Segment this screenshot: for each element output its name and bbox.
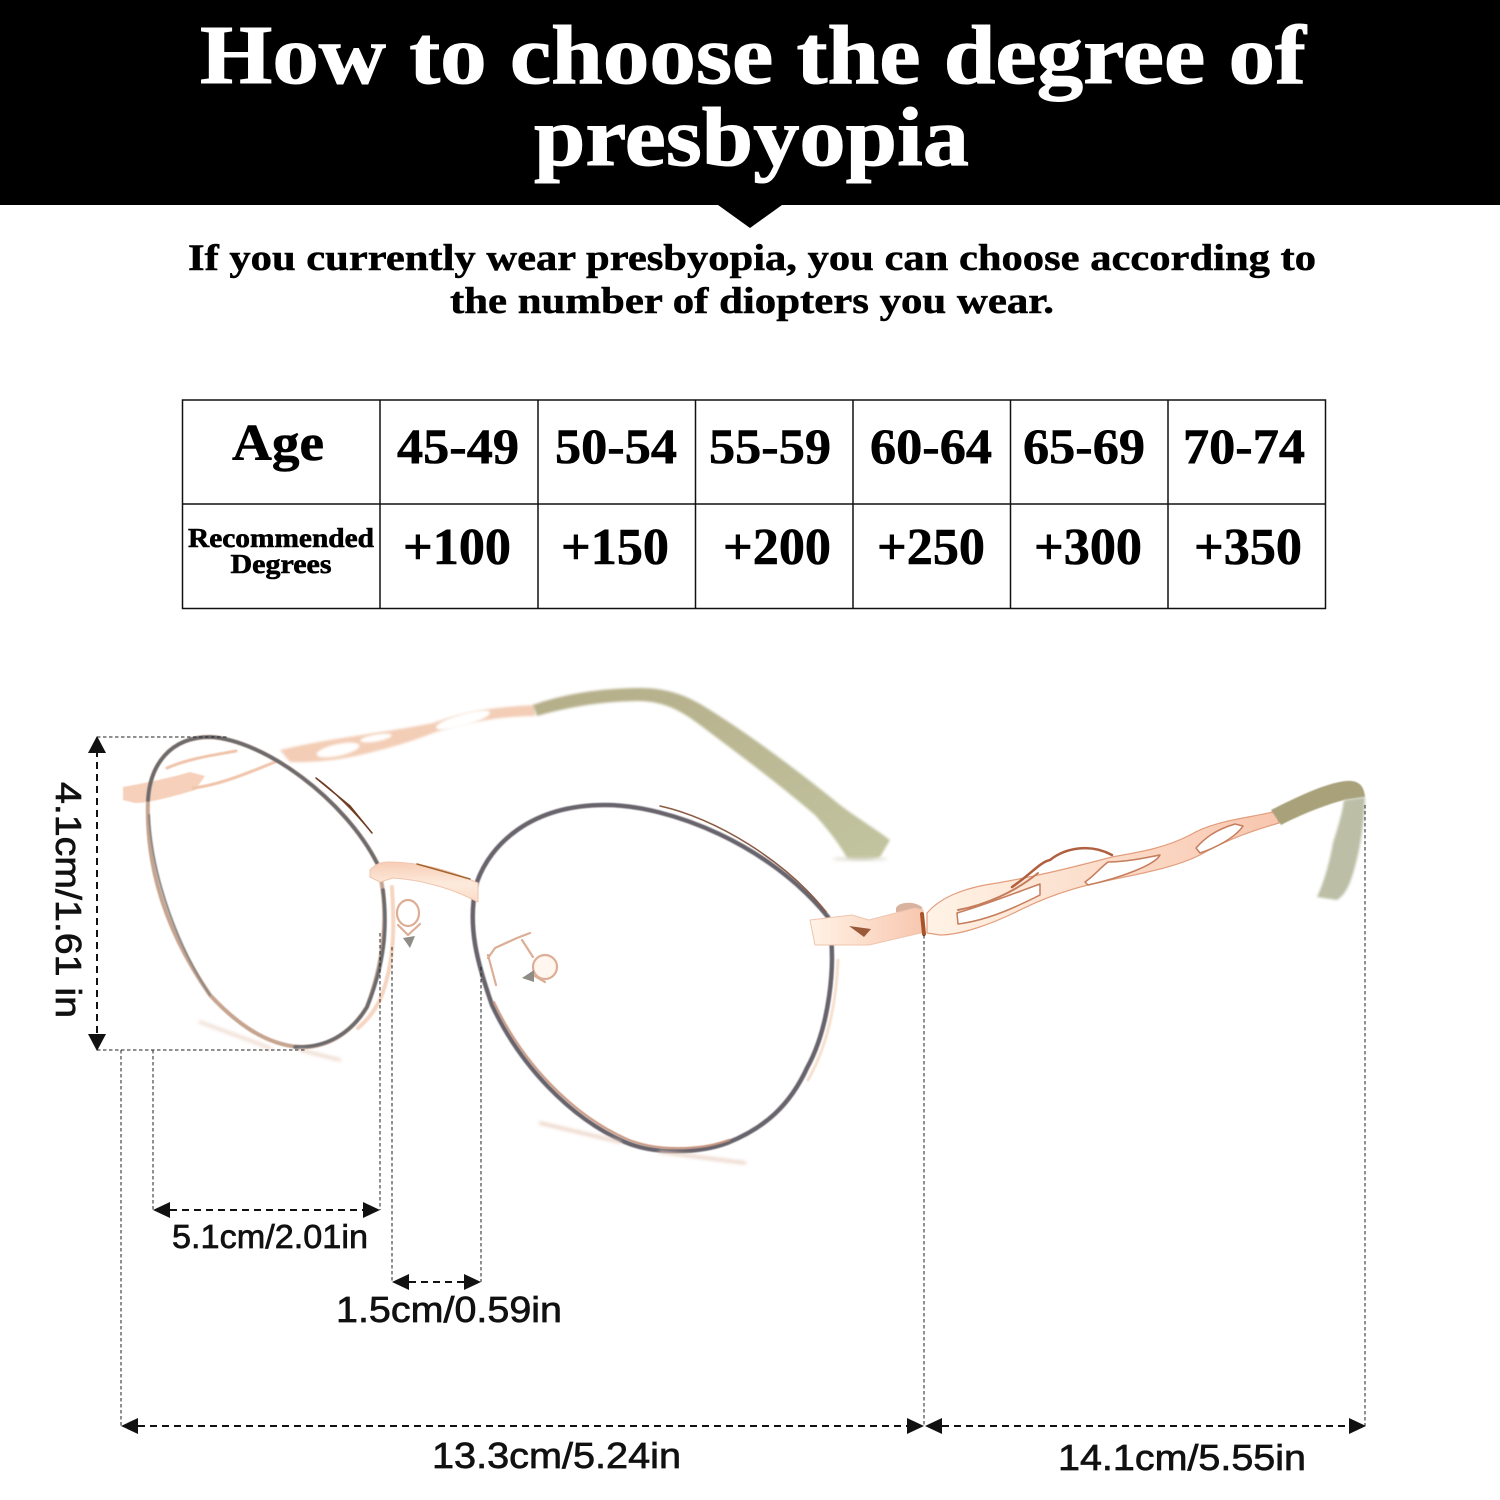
age row: 50-54	[555, 418, 677, 474]
dimension: bridge width: 1.5cm/0.59in	[336, 1289, 562, 1330]
header banner	[0, 0, 1500, 228]
recommended degrees row: +100	[403, 519, 511, 576]
dimension: frame width: 13.3cm/5.24in	[432, 1435, 681, 1476]
recommended degrees row: Degrees	[230, 549, 332, 579]
dimension: frame width	[121, 935, 924, 1476]
recommended degrees row: +200	[723, 519, 831, 576]
dimension: lens height: 4.1cm/1.61 in	[48, 782, 89, 1018]
recommended degrees row: Recommended	[188, 523, 374, 553]
dimension: lens width	[153, 933, 380, 1255]
age row: 65-69	[1023, 418, 1145, 474]
dimension: temple length: 14.1cm/5.55in	[1058, 1437, 1306, 1478]
title	[200, 9, 1307, 184]
right lens	[200, 805, 838, 1163]
age row: 60-64	[870, 418, 992, 474]
left lens	[148, 737, 393, 1047]
bridge	[370, 862, 478, 902]
subtitle: If you currently wear presbyopia, you can choose according to	[188, 237, 1316, 278]
dimension: temple length	[925, 805, 1366, 1478]
recommended degrees row	[188, 519, 1302, 579]
age and degree table	[182, 400, 1326, 608]
age row	[232, 415, 1305, 474]
dimension: lens width: 5.1cm/2.01in	[172, 1218, 368, 1255]
recommended degrees row: +300	[1034, 519, 1142, 576]
title: How to choose the degree of	[200, 9, 1307, 102]
glasses illustration	[123, 688, 1365, 1163]
subtitle: the number of diopters you wear.	[450, 280, 1054, 321]
dimension: lens height	[48, 736, 305, 1051]
age row: Age	[232, 415, 324, 472]
age row: 45-49	[397, 418, 519, 474]
recommended degrees row: +250	[877, 519, 985, 576]
far temple	[123, 688, 890, 860]
recommended degrees row: +350	[1194, 519, 1302, 576]
hinge	[810, 903, 925, 945]
recommended degrees row: +150	[561, 519, 669, 576]
age row: 55-59	[709, 418, 831, 474]
near temple	[927, 781, 1365, 935]
age row: 70-74	[1183, 418, 1305, 474]
title: presbyopia	[534, 91, 969, 184]
dimension: bridge width	[336, 947, 562, 1330]
subtitle	[188, 237, 1316, 321]
nose pads	[397, 900, 557, 985]
